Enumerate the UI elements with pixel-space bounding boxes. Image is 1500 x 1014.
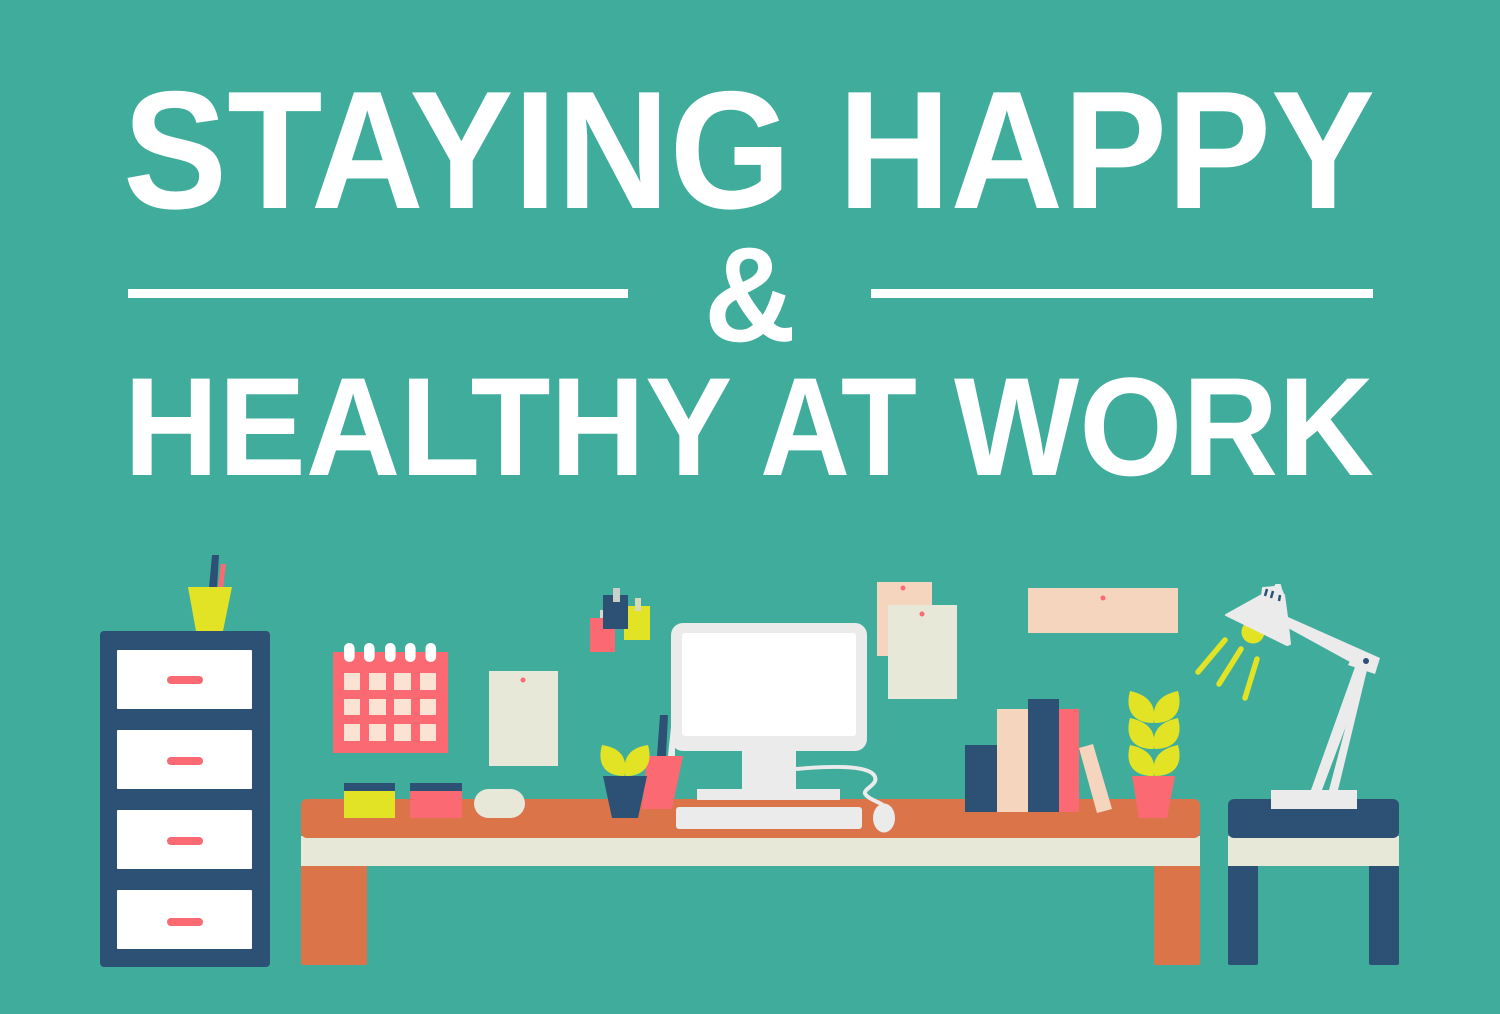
eraser [474,789,525,818]
pinned note left [489,671,558,766]
plant and pen cup by monitor [600,715,683,818]
title line 2: HEALTHY [124,348,731,505]
pencil cup on cabinet [188,555,232,631]
lamp shade [1226,585,1290,645]
lamp joint [1348,657,1380,674]
ampersand with divider rules: & [704,219,796,370]
pinned notes right of monitor [877,582,957,699]
title line 2: AT [760,348,917,505]
sticky notes [590,588,650,652]
mouse and cable [796,767,895,832]
title line 1: HAPPY [838,56,1375,244]
title line 2: WORK [954,348,1374,505]
yellow jar [344,783,395,818]
bulb [1242,620,1264,644]
desk [301,799,1200,965]
title [123,56,1375,505]
lamp arms [1288,617,1380,790]
ampersand with divider rules [128,219,1373,370]
light rays [1198,640,1257,698]
keyboard [676,807,862,829]
wide pinned note [1028,588,1178,633]
filing cabinet [100,631,270,967]
desk lamp [1198,585,1380,809]
title line 1: STAYING [123,56,791,244]
wall calendar [333,643,448,753]
lamp base [1271,790,1357,809]
side table [1228,799,1399,965]
books [965,699,1112,813]
potted plant right [1128,691,1180,818]
coral jar [410,783,462,818]
computer monitor [671,623,867,800]
